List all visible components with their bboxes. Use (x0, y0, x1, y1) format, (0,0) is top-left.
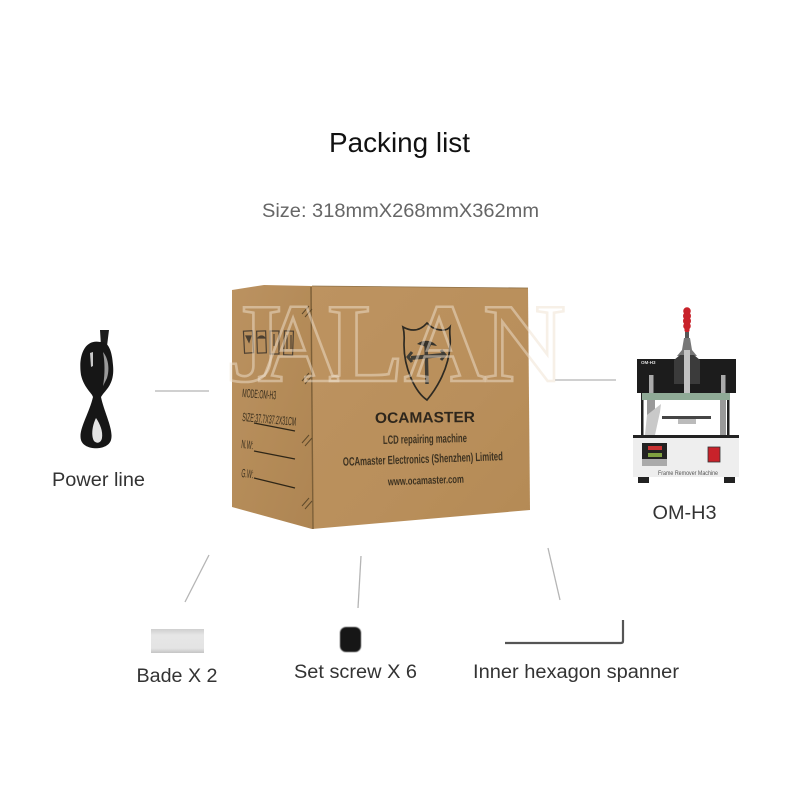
brand text: OCAMASTER (375, 409, 475, 427)
left side labels: MODE:OM-H3 (242, 386, 277, 402)
box front face (312, 286, 530, 529)
tape marks (302, 306, 312, 509)
handling icons (243, 331, 293, 355)
icon: power line (80, 330, 113, 448)
icon: hex spanner (505, 620, 623, 643)
label: hex spanner: Inner hexagon spanner (473, 662, 680, 683)
label: set screw: Set screw X 6 (294, 662, 417, 683)
cardboard box: LCD repairing machine (383, 431, 467, 447)
icon: blade (151, 629, 204, 653)
icon: set screw (340, 627, 361, 652)
cardboard box: www.ocamaster.com (387, 474, 464, 488)
cardboard box: OCAmaster Electronics (Shenzhen) Limited (343, 449, 503, 469)
title: Packing list (329, 127, 470, 158)
product image: OM-H3 machine (633, 307, 739, 483)
watermark JALAN: JALAN (226, 282, 565, 406)
left side labels: N.W: (241, 437, 254, 452)
product image: OM-H3 machine: Frame Remover Machine (658, 471, 719, 477)
handle (683, 307, 691, 333)
cardboard box: SIZE:37.7X37.2X31CM (242, 410, 297, 429)
left side labels: G.W: (241, 466, 254, 481)
cardboard box (232, 285, 530, 529)
left side labels (241, 386, 297, 481)
connector lines (155, 380, 616, 608)
size text: Size: 318mmX268mmX362mm (262, 201, 539, 222)
label: power line: Power line (52, 470, 145, 491)
label: OM-H3: OM-H3 (652, 503, 716, 524)
product image: OM-H3 machine: OM-H3 (641, 360, 656, 365)
box left face (232, 285, 312, 529)
shield logo (403, 323, 450, 400)
label: blade: Bade X 2 (136, 666, 218, 687)
